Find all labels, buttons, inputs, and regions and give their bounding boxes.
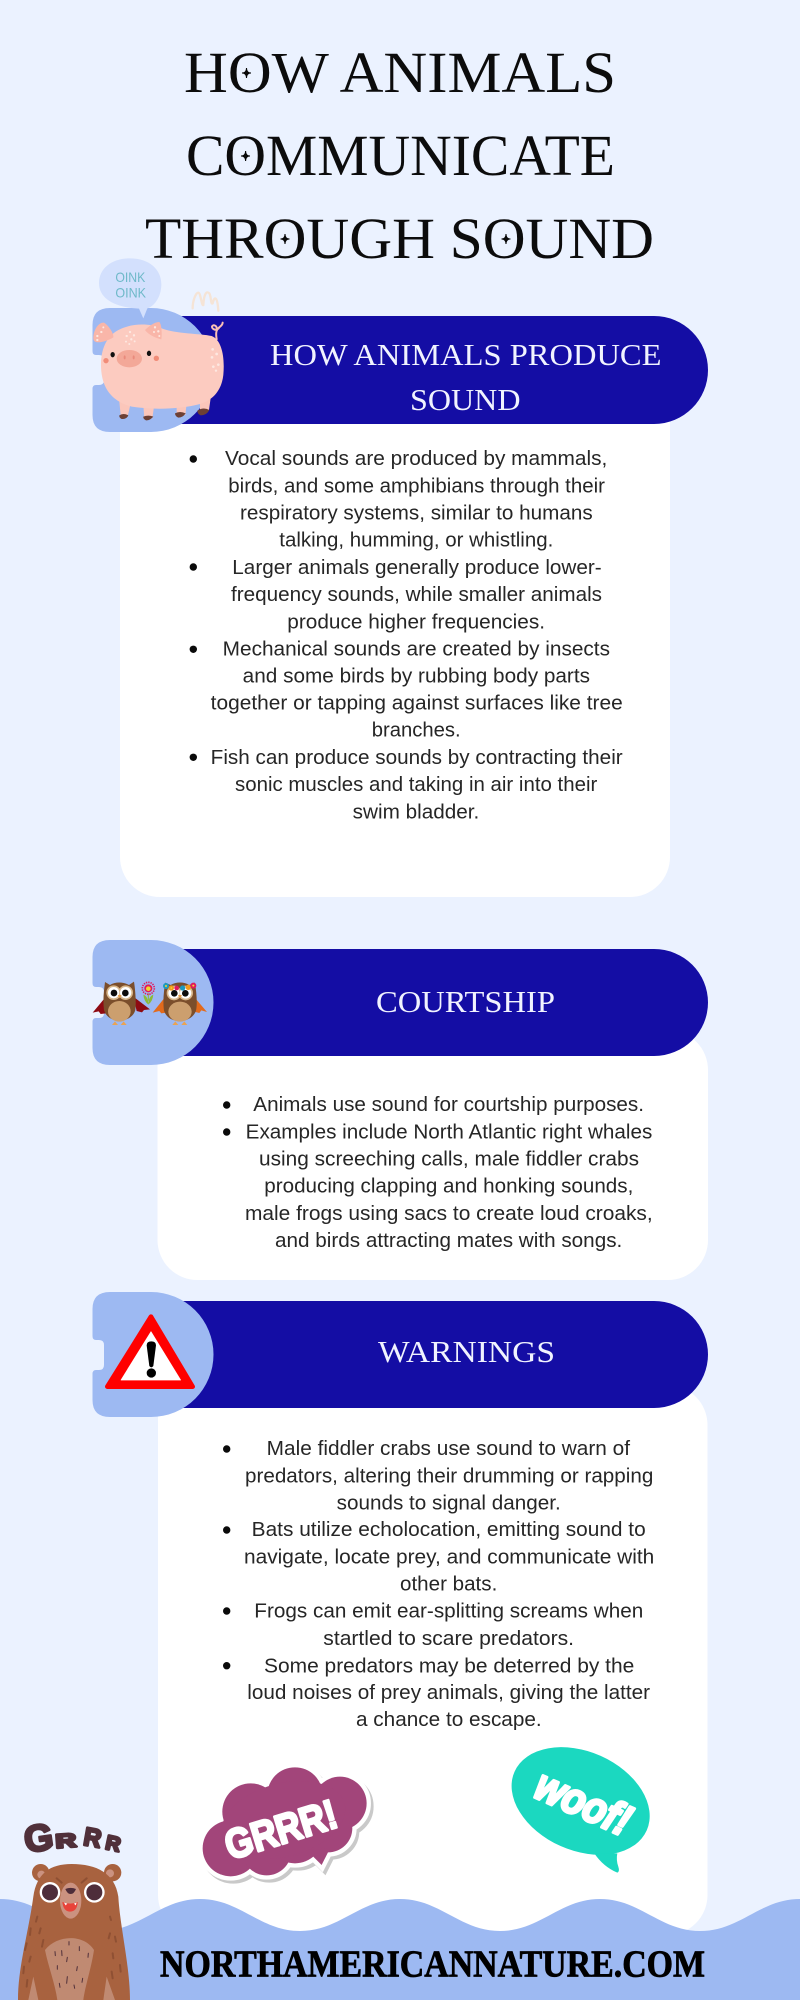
item: bats: navigate, locate prey, and communicate with bbox=[244, 1545, 654, 1568]
grrr lettering bbox=[21, 1815, 123, 1861]
icon badge: owls bbox=[92, 940, 214, 1065]
item: frogs: startled to scare predators. bbox=[323, 1627, 574, 1650]
item: fish bbox=[190, 746, 623, 823]
speech bubble: oink oink: OINK bbox=[115, 269, 146, 285]
item: larger animals: produce higher frequencies. bbox=[287, 610, 545, 633]
item: courtship examples: Examples include North Atlantic right whales bbox=[246, 1120, 652, 1143]
speech bubble: oink oink: OINK bbox=[115, 284, 147, 300]
sticker: grrr speech bubble bbox=[203, 1767, 369, 1879]
item: vocal sounds bbox=[190, 447, 607, 552]
item: larger animals: frequency sounds, while smaller animals bbox=[231, 583, 602, 606]
item: fiddler crabs bbox=[223, 1437, 653, 1514]
item: larger animals bbox=[190, 556, 602, 633]
item: predators deterred: loud noises of prey animals, giving the latter bbox=[247, 1681, 650, 1704]
grrr lettering: R bbox=[55, 1831, 77, 1853]
icon badge: warning bbox=[92, 1292, 214, 1417]
text block: warnings bbox=[223, 1437, 654, 1731]
owl with orange wings bbox=[153, 982, 207, 1025]
grrr lettering: G bbox=[21, 1815, 56, 1861]
item: frogs: Frogs can emit ear-splitting screams when bbox=[254, 1600, 643, 1623]
heading band: warnings: WARNINGS bbox=[378, 1334, 555, 1369]
icon: warning triangle bbox=[107, 1317, 193, 1387]
footer wave bbox=[0, 1899, 800, 2000]
icon: pig bbox=[93, 292, 224, 420]
icon: bear with grrr bbox=[18, 1815, 130, 2000]
title: COMMUNICATE bbox=[186, 123, 615, 188]
sticker: grrr speech bubble: GRRR! bbox=[219, 1791, 343, 1869]
item: mechanical sounds bbox=[190, 637, 623, 742]
title: THROUGH SOUND bbox=[145, 206, 654, 271]
item: vocal sounds: birds, and some amphibians through their bbox=[228, 474, 605, 497]
item: frogs bbox=[223, 1600, 643, 1650]
item: bats bbox=[223, 1518, 654, 1595]
panel: warnings bbox=[158, 1385, 708, 1935]
item: vocal sounds: Vocal sounds are produced by mammals, bbox=[225, 447, 607, 470]
grrr lettering: R bbox=[104, 1832, 123, 1857]
item: fish: swim bladder. bbox=[353, 800, 479, 823]
item: courtship examples bbox=[223, 1120, 653, 1252]
item: larger animals: Larger animals generally produce lower- bbox=[232, 556, 602, 579]
item: mechanical sounds: and some birds by rubbing body parts bbox=[243, 664, 590, 687]
sticker: woof speech bubble bbox=[495, 1727, 667, 1875]
item: courtship purposes: Animals use sound for courtship purposes. bbox=[253, 1093, 644, 1116]
item: courtship examples: producing clapping and honking sounds, bbox=[264, 1175, 633, 1198]
text block: courtship bbox=[223, 1093, 653, 1252]
title bbox=[145, 40, 654, 271]
item: bats: Bats utilize echolocation, emitting sound to bbox=[252, 1518, 646, 1541]
item: courtship examples: male frogs using sacs to create loud croaks, bbox=[245, 1202, 653, 1225]
owl with red wings bbox=[93, 982, 150, 1025]
heading band: how animals produce sound: HOW ANIMALS PRODUCE bbox=[270, 337, 662, 372]
text block: how animals produce sound bbox=[190, 447, 623, 823]
heading band: how animals produce sound bbox=[150, 316, 708, 424]
item: vocal sounds: respiratory systems, similar to humans bbox=[240, 501, 593, 524]
icon: owls with flower bbox=[93, 982, 207, 1025]
heading band: courtship bbox=[150, 949, 708, 1056]
grrr lettering: R bbox=[82, 1823, 104, 1854]
panel: courtship bbox=[158, 1030, 708, 1280]
item: courtship examples: and birds attracting mates with songs. bbox=[275, 1229, 622, 1252]
item: fiddler crabs: predators, altering their drumming or rapping bbox=[245, 1464, 653, 1487]
icon badge: pig bbox=[92, 308, 213, 432]
item: fish: sonic muscles and taking in air into their bbox=[235, 773, 597, 796]
speech bubble: oink oink bbox=[99, 258, 161, 318]
item: predators deterred: Some predators may be deterred by the bbox=[264, 1654, 634, 1677]
heading band: how animals produce sound: SOUND bbox=[410, 382, 520, 417]
sticker: woof speech bubble: woof! bbox=[528, 1760, 639, 1846]
item: fish: Fish can produce sounds by contracting their bbox=[211, 746, 623, 769]
panel: how animals produce sound bbox=[120, 400, 670, 897]
flower bbox=[142, 982, 154, 1005]
item: mechanical sounds: Mechanical sounds are created by insects bbox=[223, 637, 610, 660]
item: mechanical sounds: together or tapping against surfaces like tree bbox=[211, 692, 623, 714]
item: bats: other bats. bbox=[400, 1572, 497, 1595]
item: fiddler crabs: sounds to signal danger. bbox=[337, 1491, 561, 1514]
item: courtship examples: using screeching calls, male fiddler crabs bbox=[259, 1148, 639, 1171]
title: HOW ANIMALS bbox=[184, 40, 616, 105]
item: predators deterred: a chance to escape. bbox=[356, 1708, 542, 1731]
item: mechanical sounds: branches. bbox=[372, 719, 461, 742]
heading band: courtship: COURTSHIP bbox=[376, 984, 555, 1019]
item: predators deterred bbox=[223, 1654, 650, 1731]
heading band: warnings bbox=[150, 1301, 708, 1408]
footer website: NORTHAMERICANNATURE.COM bbox=[160, 1944, 705, 1986]
item: fiddler crabs: Male fiddler crabs use sound to warn of bbox=[267, 1437, 630, 1460]
item: vocal sounds: talking, humming, or whistling. bbox=[279, 529, 553, 552]
